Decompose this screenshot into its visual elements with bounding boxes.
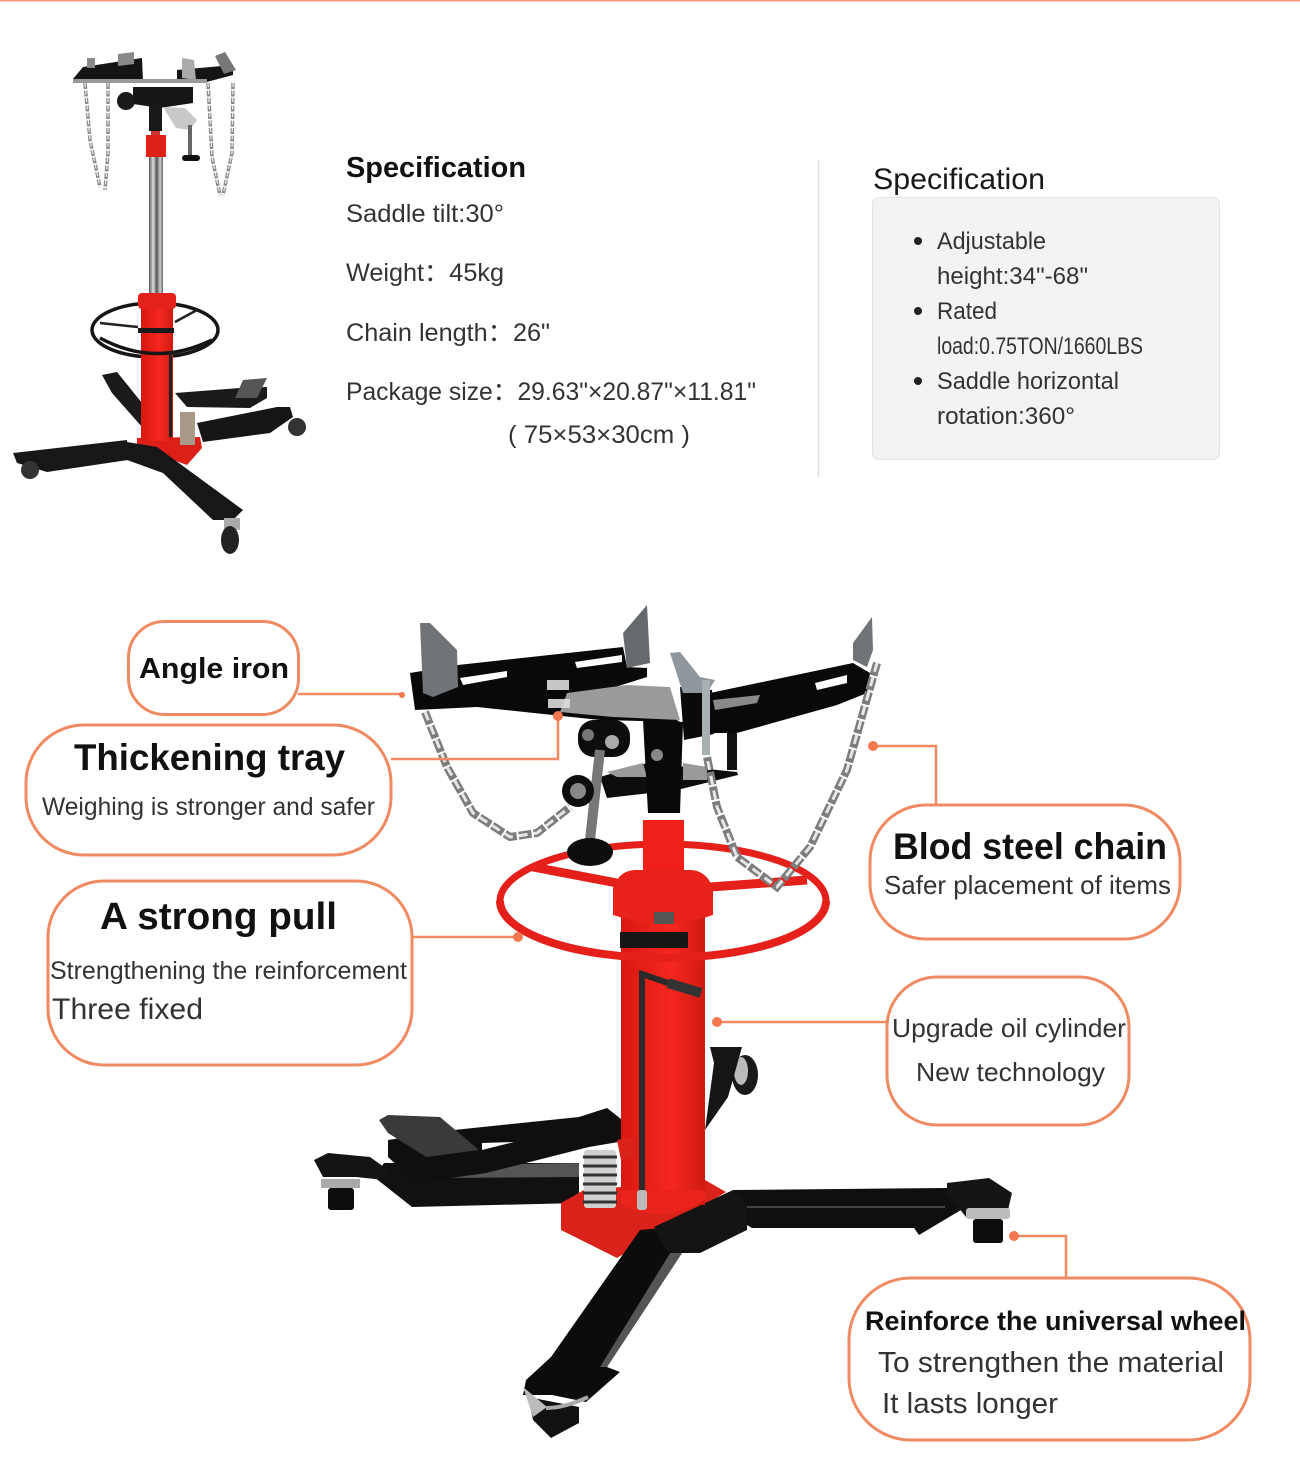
hand wheel rear arc bbox=[500, 844, 826, 901]
saddle tray bbox=[410, 605, 873, 755]
rear leg and wheel bbox=[705, 1047, 758, 1130]
callout: Thickening tray bbox=[26, 711, 563, 855]
bullet: saddle rotation: Saddle horizontal bbox=[937, 368, 1119, 395]
bullet: adjustable height: height:34"-68" bbox=[937, 263, 1088, 290]
callout: A strong pull: Strengthening the reinforcement bbox=[50, 957, 407, 985]
front leg bbox=[523, 1190, 747, 1438]
callout: Reinforce the universal wheel: Reinforce the universal wheel bbox=[865, 1306, 1246, 1336]
tilt bracket bbox=[562, 720, 738, 866]
right leg bbox=[733, 1178, 1012, 1243]
callout: Reinforce the universal wheel bbox=[849, 1231, 1250, 1440]
spec: package size: Package size：29.63"×20.87"×11.81" bbox=[346, 378, 756, 406]
bullet: adjustable height bbox=[914, 228, 1088, 290]
bullet: saddle rotation bbox=[914, 368, 1119, 430]
bullet: rated load: Rated bbox=[937, 298, 997, 325]
return spring bbox=[583, 1150, 617, 1208]
specification list bbox=[346, 152, 756, 449]
callout: Blod steel chain: Safer placement of items bbox=[884, 870, 1171, 900]
pump handle bbox=[637, 974, 701, 1210]
heading: Specification: Specification bbox=[346, 152, 526, 184]
large product photo: transmission jack bbox=[314, 605, 1012, 1438]
bullet: rated load: load:0.75TON/1660LBS bbox=[937, 333, 1143, 360]
chains bbox=[425, 663, 877, 887]
heading: second specification: Specification bbox=[873, 163, 1045, 196]
spec: saddle tilt: Saddle tilt:30° bbox=[346, 200, 504, 228]
spec: weight: Weight：45kg bbox=[346, 259, 504, 287]
callout: Blod steel chain: Blod steel chain bbox=[893, 826, 1167, 867]
callout: Angle iron bbox=[128, 622, 405, 714]
bullet: rated load bbox=[914, 298, 1143, 360]
callout: Upgrade oil cylinder: New technology bbox=[916, 1057, 1105, 1087]
callout: Reinforce the universal wheel: To strengthen the material bbox=[878, 1347, 1224, 1379]
small product photo: transmission jack bbox=[13, 52, 306, 554]
callout: Thickening tray: Weighing is stronger and safer bbox=[42, 793, 375, 821]
callout: A strong pull: Three fixed bbox=[52, 993, 203, 1026]
piston bbox=[613, 820, 713, 924]
red base plate bbox=[561, 1180, 726, 1258]
callout: Upgrade oil cylinder bbox=[712, 977, 1129, 1125]
red oil cylinder bbox=[617, 900, 705, 1214]
bullet: saddle rotation: rotation:360° bbox=[937, 403, 1075, 430]
panel: specification bullets bbox=[872, 198, 1220, 460]
callout: A strong pull bbox=[48, 881, 523, 1065]
left leg bbox=[314, 1153, 579, 1210]
hand wheel front arc and spokes bbox=[500, 867, 826, 958]
spec: package size metric: ( 75×53×30cm ) bbox=[508, 421, 690, 449]
bullet: adjustable height: Adjustable bbox=[937, 228, 1046, 255]
callout: A strong pull: A strong pull bbox=[100, 896, 337, 938]
foot pedal bbox=[379, 1108, 635, 1183]
callout: Angle iron: Angle iron bbox=[139, 653, 289, 685]
callout: Thickening tray: Thickening tray bbox=[74, 737, 345, 778]
callout: Reinforce the universal wheel: It lasts longer bbox=[882, 1388, 1058, 1420]
spec: chain length: Chain length：26" bbox=[346, 319, 550, 347]
callout: Upgrade oil cylinder: Upgrade oil cylinder bbox=[892, 1013, 1126, 1043]
callout: Blod steel chain bbox=[868, 741, 1180, 939]
